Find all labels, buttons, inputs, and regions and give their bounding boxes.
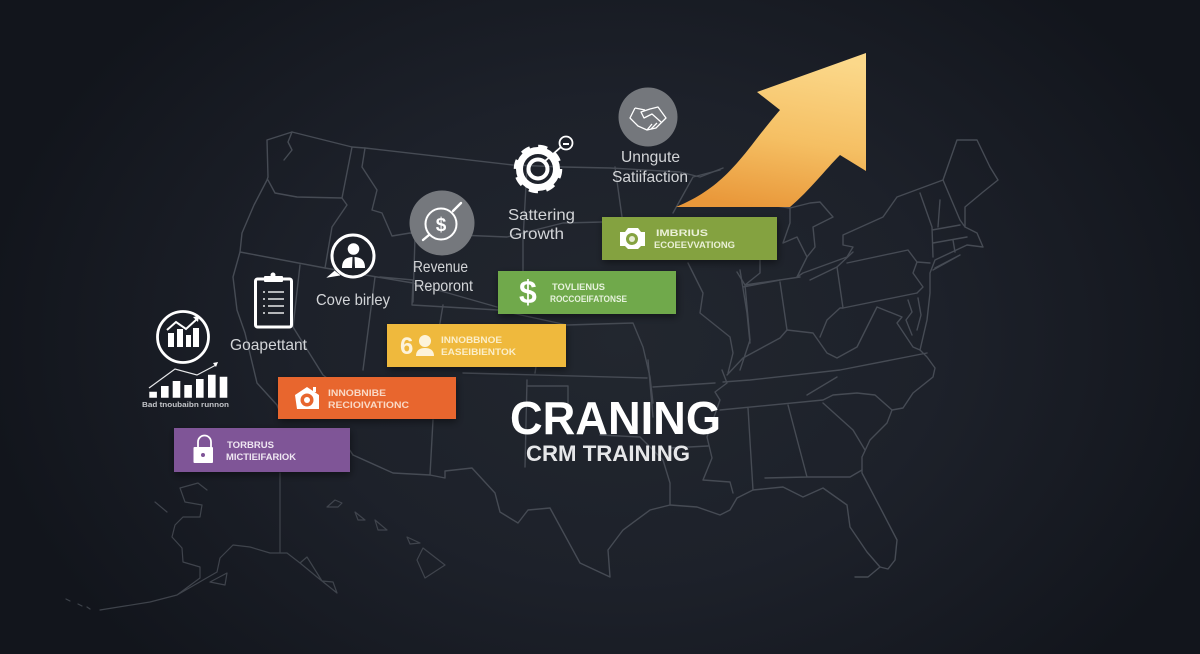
label <box>413 259 473 295</box>
icon: clipboard <box>256 272 292 327</box>
growth arrow <box>676 53 866 207</box>
milestone: Sattering Growth <box>508 136 575 243</box>
bar text: ROCCOEIFATONSE <box>550 294 627 305</box>
title <box>510 392 721 466</box>
chart caption: Bad tnoubaibn runnon <box>142 400 229 409</box>
bar text: INNOBBNOE <box>441 335 502 346</box>
label: Unngute <box>621 149 680 166</box>
map: state borders central and east <box>600 180 967 505</box>
milestone: Satisfaction <box>612 88 688 186</box>
bar text: RECIOIVATIONC <box>328 400 409 411</box>
icon: dollar circle: $ <box>436 215 447 236</box>
label: Sattering <box>508 207 575 224</box>
bar text: TORBRUS <box>227 440 274 451</box>
icon: person speech bubble <box>328 235 374 277</box>
map: state borders west <box>240 147 653 475</box>
bar text <box>441 335 516 358</box>
icon: six and person: 6 <box>400 333 413 360</box>
bar: olive <box>602 217 777 260</box>
bar text: MICTIEIFARIOK <box>226 452 296 463</box>
icon: handshake circle <box>618 88 678 146</box>
bar text: TOVLIENUS <box>552 282 605 293</box>
bar text <box>328 388 409 411</box>
label <box>612 149 688 186</box>
map: Alaska <box>66 473 337 610</box>
subheading: CRM TRAINING <box>526 441 690 466</box>
bar: yellow <box>387 324 566 367</box>
bar text <box>550 282 627 305</box>
icon: camera <box>620 228 645 249</box>
icon: chart in circle <box>158 312 208 362</box>
label: Revenue <box>413 259 468 276</box>
icon: dollar sign: $ <box>519 274 537 310</box>
label: Growth <box>509 226 564 243</box>
icon: six and person <box>400 333 434 360</box>
bar text: EASEIBIENTOK <box>441 347 516 358</box>
label: Satiifaction <box>612 169 688 186</box>
bar text <box>654 228 735 251</box>
label <box>508 207 575 243</box>
icon: house <box>295 387 319 409</box>
bar text <box>226 440 296 463</box>
headline: CRANING <box>510 392 721 444</box>
map: Hawaii <box>327 500 445 578</box>
icon: gear target <box>516 136 572 191</box>
bar: purple <box>174 428 350 472</box>
milestone: Goapettant <box>230 272 308 354</box>
milestone: chart icon group <box>142 312 229 409</box>
map of the United States <box>66 132 998 610</box>
bar text: INNOBNIBE <box>328 388 386 399</box>
bar: green <box>498 271 676 314</box>
bar: orange <box>278 377 456 419</box>
label: Goapettant <box>230 337 308 354</box>
icon: padlock <box>194 436 213 463</box>
bar chart <box>149 362 227 398</box>
label: Reporont <box>414 278 473 295</box>
label: Cove birley <box>316 292 390 309</box>
map outline: contiguous states <box>233 132 998 577</box>
milestone: Revenue Report <box>410 190 474 295</box>
bar text: IMBRIUS <box>656 228 708 239</box>
bar text: ECOEEVVATIONG <box>654 240 735 251</box>
milestone: Cove birley <box>316 235 390 309</box>
